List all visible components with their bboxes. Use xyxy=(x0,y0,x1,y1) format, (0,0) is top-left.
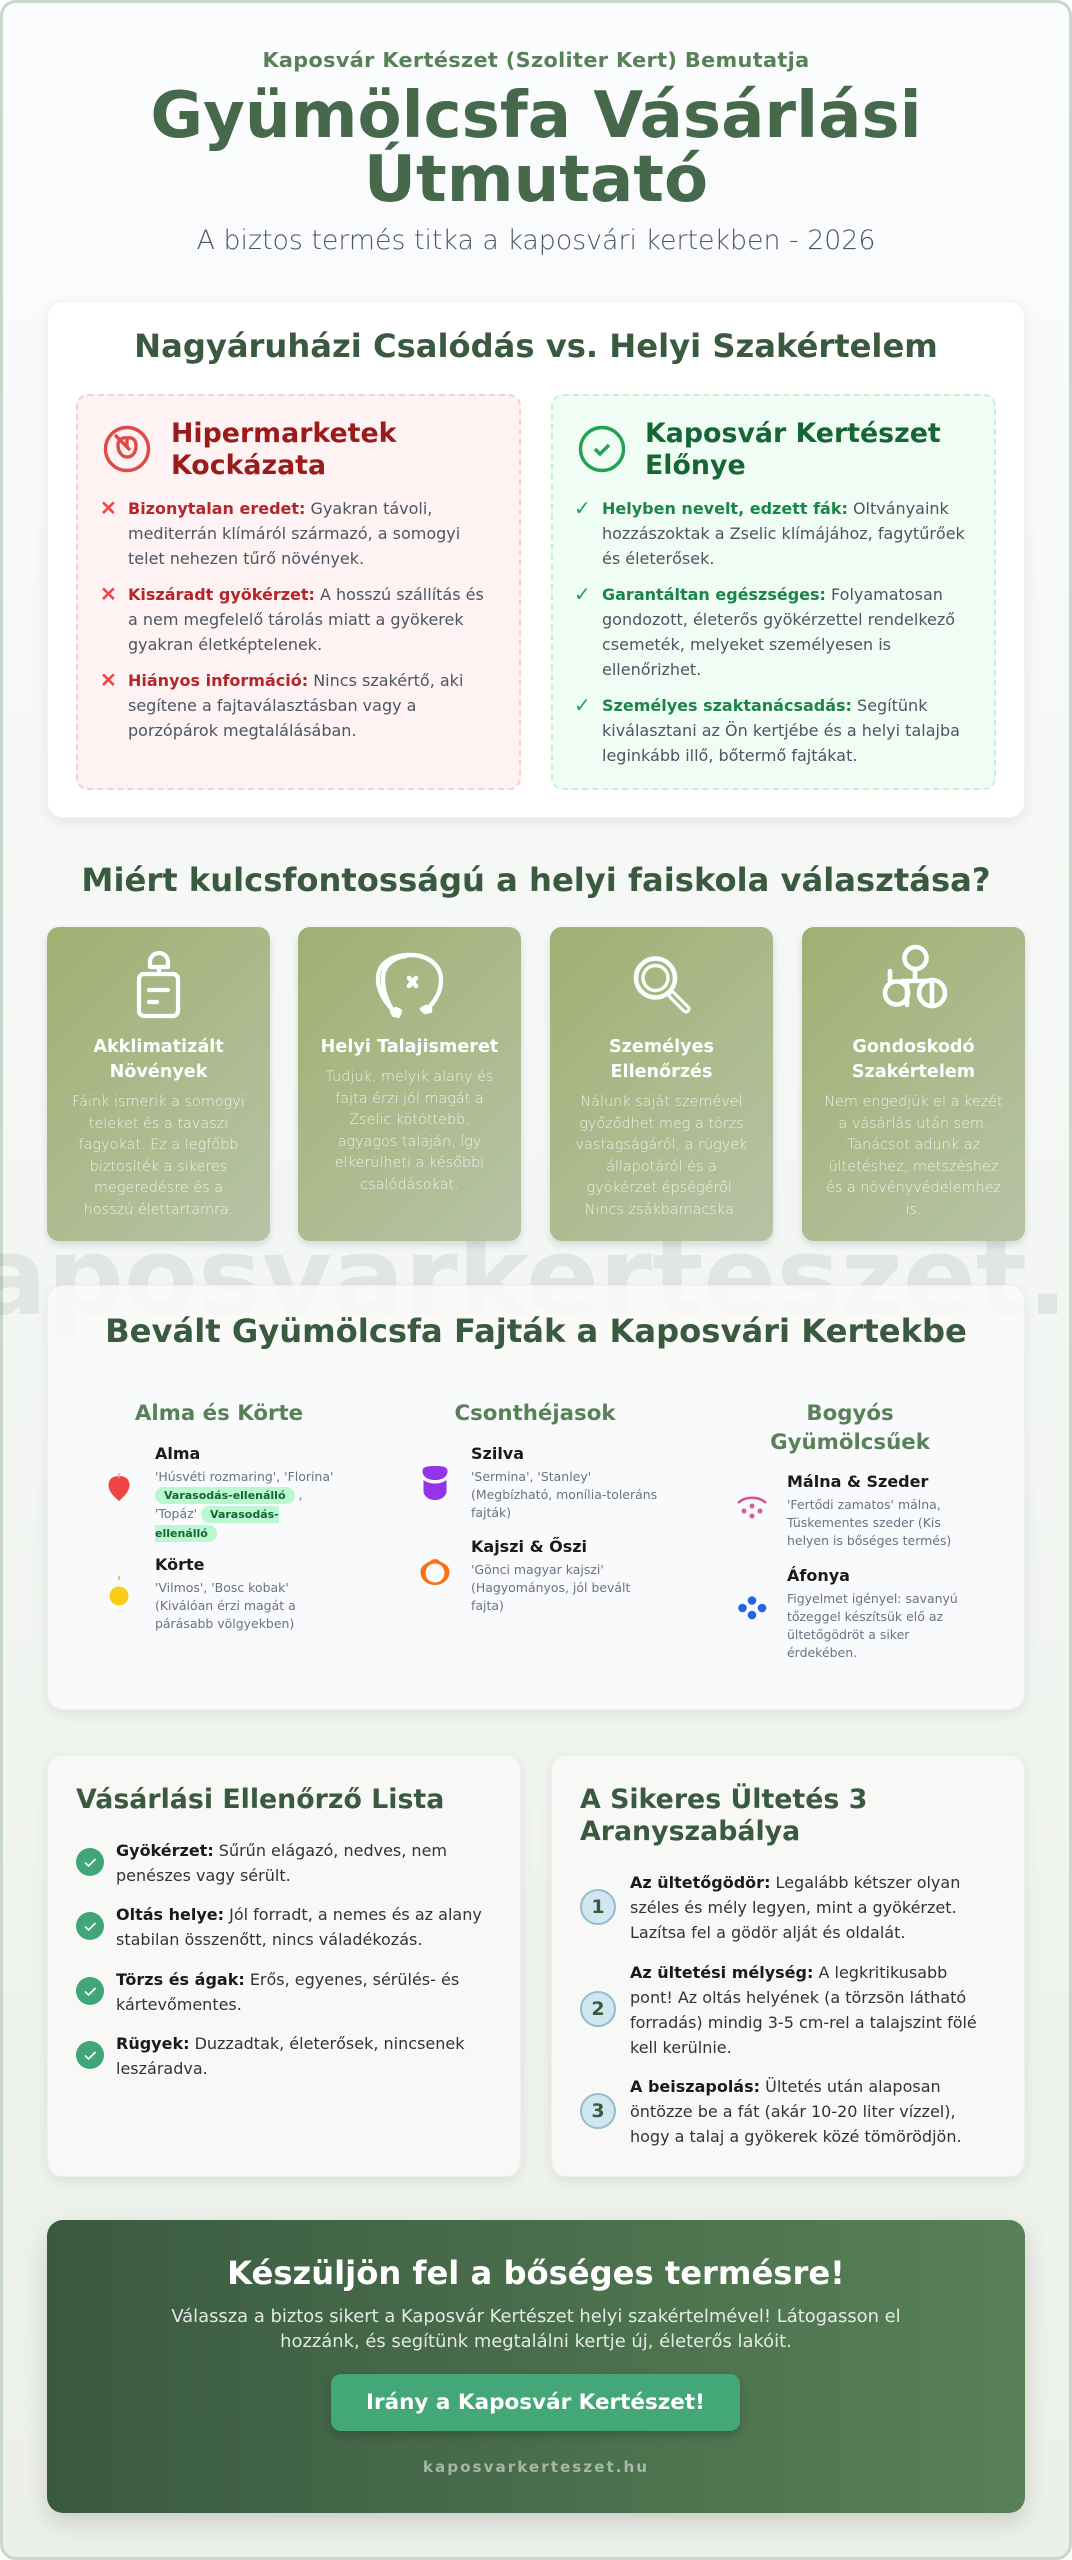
column: berries xyxy=(708,1380,995,1682)
feature text: Nem engedjük el a kezét xyxy=(824,1094,1003,1110)
feature card: soil knowledge xyxy=(298,927,521,1241)
checklist item 4 xyxy=(47,2030,521,2080)
advantage 3: Személyes szaktanácsadás: Segítünk xyxy=(602,696,927,714)
feature text xyxy=(824,1094,1003,1218)
feature text: Nálunk saját szemével xyxy=(580,1094,743,1110)
feature title: Gondoskodó xyxy=(852,1037,975,1057)
heading: rules: A Sikeres Ültetés 3 xyxy=(580,1784,867,1815)
feature title: Szakértelem xyxy=(852,1062,975,1082)
advantage 2: gondozott, életerős gyökérzettel rendelkező xyxy=(602,610,955,628)
rule 1 xyxy=(551,1870,1025,1944)
feature card: acclimatized xyxy=(47,927,270,1241)
name: Körte xyxy=(155,1555,204,1574)
risk 1: ✕ xyxy=(100,496,117,520)
feature title: Ellenőrzés xyxy=(611,1062,712,1082)
feature title xyxy=(609,1037,714,1082)
risk 2: Kiszáradt gyökérzet: A hosszú szállítás és xyxy=(128,584,484,604)
advantage 2: Garantáltan egészséges: Folyamatosan xyxy=(602,584,943,604)
heading: comparison: Nagyáruházi Csalódás vs. Helyi Szakértelem xyxy=(134,327,938,365)
icon: check xyxy=(76,1912,104,1940)
feature title: Helyi Talajismeret xyxy=(321,1037,498,1057)
advantage 2: ✓ xyxy=(574,582,591,606)
name: Szilva xyxy=(471,1444,524,1463)
risk 2: gyakran életképtelenek. xyxy=(128,634,322,654)
number badge xyxy=(580,1991,616,2027)
feature text xyxy=(575,1094,748,1218)
description: párásabb völgyekben) xyxy=(155,1616,294,1631)
variety: apple xyxy=(108,1444,333,1542)
advantage 1: ✓ xyxy=(574,496,591,520)
feature text: Fáink ismerik a somogyi xyxy=(72,1094,245,1110)
icon: pear xyxy=(110,1576,128,1606)
variety: pear xyxy=(110,1555,296,1631)
feature text: győződhet meg a törzs xyxy=(579,1116,744,1132)
cta button xyxy=(331,2374,740,2431)
rule 3: A beiszapolás: Ültetés után alaposan xyxy=(630,2076,941,2096)
feature text: is. xyxy=(905,1202,922,1218)
description: (Hagyományos, jól bevált xyxy=(471,1580,630,1595)
icon: check xyxy=(76,1848,104,1876)
icon: check circle xyxy=(578,426,626,472)
feature text: vastagságáról, a rügyek xyxy=(575,1137,748,1153)
risk 3 xyxy=(100,668,463,740)
column heading: Gyümölcsűek xyxy=(770,1430,930,1455)
advantage 1: Helyben nevelt, edzett fák: Oltványaink xyxy=(602,498,949,518)
feature text: állapotáról és a xyxy=(606,1158,717,1174)
description xyxy=(155,1580,296,1631)
number badge: 2 xyxy=(591,1998,605,2020)
name: Áfonya xyxy=(787,1566,850,1585)
feature text: agyagos talaján, így xyxy=(338,1134,481,1150)
risk 3: Hiányos információ: Nincs szakértő, aki xyxy=(128,670,463,690)
advantage 3: leginkább illő, bőtermő fajtákat. xyxy=(602,746,857,764)
description: fajta) xyxy=(471,1598,504,1613)
checklist item 2 xyxy=(47,1902,521,1952)
risk 1 xyxy=(100,496,460,568)
risk 2 xyxy=(100,582,484,654)
advantage list xyxy=(574,496,965,764)
icon: magnifier xyxy=(634,956,690,1014)
column: stone fruits xyxy=(393,1380,680,1682)
feature text: Nincs zsákbamacska. xyxy=(585,1202,738,1218)
cta text: Válassza a biztos sikert a Kaposvár Kertészet helyi szakértelmével! Látogasson el xyxy=(171,2306,901,2327)
cta heading: Készüljön fel a bőséges termésre! xyxy=(227,2254,845,2292)
panel title: Kaposvár Kertészet xyxy=(645,418,941,449)
website: kaposvarkerteszet.hu xyxy=(423,2458,649,2476)
feature text: fagyokat. Ez a legfőbb xyxy=(79,1137,238,1153)
checklist item 3: Törzs és ágak: Erős, egyenes, sérülés- és xyxy=(116,1970,459,1988)
rule 1: Lazítsa fel a gödör alját és oldalát. xyxy=(630,1922,905,1942)
cta button: Irány a Kaposvár Kertészet! xyxy=(366,2390,705,2415)
feature text: elkerülheti a későbbi xyxy=(335,1155,484,1171)
advantage 2: ellenőrizhet. xyxy=(602,660,701,678)
panel: golden rules xyxy=(551,1755,1025,2177)
feature text: hosszú élettartamra. xyxy=(84,1202,233,1218)
description: Figyelmet igényel: savanyú xyxy=(787,1591,958,1606)
feature text: gyökérzet épségéről. xyxy=(586,1180,736,1196)
feature text: és a növényvédelemhez xyxy=(826,1180,1001,1196)
checklist item 1: Gyökérzet: Sűrűn elágazó, nedves, nem xyxy=(116,1840,447,1860)
icon: raspberry xyxy=(737,1496,767,1518)
number badge xyxy=(580,2093,616,2129)
name: Málna & Szeder xyxy=(787,1472,928,1491)
description xyxy=(787,1496,951,1550)
description xyxy=(471,1469,657,1520)
advantage 2 xyxy=(574,582,955,678)
feature title: Akklimatizált xyxy=(93,1037,224,1057)
feature text: csalódásokat. xyxy=(360,1176,459,1192)
rule 2: kell kerülnie. xyxy=(630,2038,732,2056)
column heading: Alma és Körte xyxy=(135,1401,303,1426)
column heading: Csonthéjasok xyxy=(454,1401,616,1426)
rule 2 xyxy=(551,1960,1025,2060)
panel title xyxy=(171,418,397,481)
advantage 1: és életerősek. xyxy=(602,548,714,568)
cta text xyxy=(47,2304,1025,2354)
risk 2: a nem megfelelő tárolás miatt a gyökerek xyxy=(128,610,464,628)
panel title: Előnye xyxy=(645,450,746,481)
rule 2: forradás) mindig 3-5 cm-rel a talajszint fölé xyxy=(630,2012,977,2032)
call to action xyxy=(47,2220,1025,2513)
feature text: a vásárlás után sem. xyxy=(838,1116,989,1132)
icon: check xyxy=(76,1977,104,2005)
icon: apple xyxy=(108,1473,130,1501)
heading: varieties: Bevált Gyümölcsfa Fajták a Kaposvári Kertekbe xyxy=(105,1312,967,1350)
description: 'Fertődi zamatos' málna, xyxy=(787,1497,941,1512)
rule 2: Az ültetési mélység: A legkritikusabb xyxy=(630,1962,947,1982)
number badge: 3 xyxy=(591,2100,605,2122)
risk 2: ✕ xyxy=(100,582,117,606)
description xyxy=(787,1590,958,1662)
description: 'Gönci magyar kajszi' xyxy=(471,1562,604,1577)
description: tőzeggel készítsük elő az xyxy=(787,1609,943,1624)
title: Gyümölcsfa Vásárlási xyxy=(150,78,922,153)
risk 1: mediterrán klímáról származó, a somogyi xyxy=(128,524,460,542)
icon: tag xyxy=(136,950,180,1018)
icon: apricot xyxy=(420,1559,450,1585)
heading: checklist: Vásárlási Ellenőrző Lista xyxy=(76,1784,444,1815)
feature title: Személyes xyxy=(609,1037,714,1057)
variety: apricot xyxy=(420,1536,630,1613)
advantage 2: csemeték, melyeket személyesen is xyxy=(602,634,891,654)
feature text: teleket és a tavaszi xyxy=(89,1116,228,1132)
feature text: Tanácsot adunk az xyxy=(847,1137,980,1153)
icon: care xyxy=(882,944,948,1008)
feature text: ültetéshez, metszéshez xyxy=(829,1158,998,1174)
name: Kajszi & Őszi xyxy=(471,1537,587,1556)
checklist item 2: stabilan összenőtt, nincs váladékozás. xyxy=(116,1930,422,1948)
risk 3: segítene a fajtaválasztásban vagy a xyxy=(128,696,416,714)
heading: why local nursery: Miért kulcsfontosságú a helyi faiskola választása? xyxy=(81,861,991,899)
feature text: Zselic kötöttebb, xyxy=(349,1112,470,1128)
variety: raspberry xyxy=(737,1472,951,1548)
feature card: personal inspection xyxy=(550,927,773,1241)
variety: plum xyxy=(422,1444,657,1520)
description: fajták) xyxy=(471,1505,511,1520)
risk 1: Bizonytalan eredet: Gyakran távoli, xyxy=(128,498,432,518)
kicker: Kaposvár Kertészet (Szoliter Kert) Bemutatja xyxy=(262,48,810,72)
checklist item 1: penészes vagy sérült. xyxy=(116,1866,291,1884)
panel title xyxy=(645,418,941,481)
advantage 3: kiválasztani az Ön kertjébe és a helyi talajba xyxy=(602,720,960,740)
panel: comparison section xyxy=(47,301,1025,818)
header xyxy=(150,48,922,256)
panel: hypermarket risks xyxy=(76,394,521,790)
rule 2: pont! Az oltás helyének (a törzsön látható xyxy=(630,1988,966,2006)
number badge: 1 xyxy=(591,1896,605,1918)
icon: check xyxy=(76,2041,104,2069)
feature title: Növények xyxy=(110,1062,207,1082)
description: 'Húsvéti rozmaring', 'Florina' Varasodás-ellenálló , 'Topáz' Varasodás-ellenálló xyxy=(155,1469,333,1540)
description: 'Vilmos', 'Bosc kobak' xyxy=(155,1580,289,1595)
subtitle: A biztos termés titka a kaposvári kertekben - 2026 xyxy=(197,225,875,256)
feature text xyxy=(326,1069,493,1192)
cta text: hozzánk, és segítünk megtalálni kertje új, életerős lakóit. xyxy=(280,2331,792,2352)
description: Tüskementes szeder (Kis xyxy=(787,1515,941,1530)
advantage 1: hozzászoktak a Zselic klímájához, fagytűrőek xyxy=(602,524,965,542)
advantage 3 xyxy=(574,692,960,764)
advantage 1 xyxy=(574,496,965,568)
name: Alma xyxy=(155,1444,200,1463)
panel title: Hipermarketek xyxy=(171,418,396,449)
risk list xyxy=(100,496,484,740)
rule 3: hogy a talaj a gyökerek közé tömörödjön. xyxy=(630,2126,962,2146)
column heading xyxy=(770,1401,930,1455)
icon: plum xyxy=(422,1466,448,1500)
feature text xyxy=(72,1094,245,1218)
advantage 3: ✓ xyxy=(574,692,591,716)
panel: local nursery advantages xyxy=(551,394,996,790)
heading: rules xyxy=(580,1784,867,1848)
checklist item 3 xyxy=(47,1966,521,2016)
checklist item 4: leszáradva. xyxy=(116,2058,208,2078)
number badge xyxy=(580,1889,616,1925)
feature text: biztosíték a sikeres xyxy=(90,1158,227,1174)
icon: horseshoe xyxy=(376,952,444,1018)
rule 3 xyxy=(551,2074,1025,2148)
feature title xyxy=(93,1037,224,1082)
rule 1: széles és mély legyen, mint a gyökérzet. xyxy=(630,1898,957,1916)
panel: proven varieties xyxy=(47,1285,1025,1710)
heading: rules: Aranyszabálya xyxy=(580,1816,800,1847)
description: helyen is bőséges termés) xyxy=(787,1533,951,1548)
description: érdekében. xyxy=(787,1645,857,1660)
rule 1: Az ültetőgödör: Legalább kétszer olyan xyxy=(630,1872,960,1892)
icon: blueberry xyxy=(737,1594,767,1622)
feature card: caring expertise xyxy=(802,927,1025,1241)
feature text: megeredésre és a xyxy=(94,1180,223,1196)
panel title: Kockázata xyxy=(171,450,326,481)
checklist item 2: Oltás helye: Jól forradt, a nemes és az alany xyxy=(116,1904,482,1924)
description: (Kiválóan érzi magát a xyxy=(155,1598,296,1613)
checklist item 4: Rügyek: Duzzadtak, életerősek, nincsenek xyxy=(116,2034,464,2052)
description: (Megbízható, monília-toleráns xyxy=(471,1487,657,1502)
column: apple and pear xyxy=(77,1380,364,1682)
column heading: Bogyós xyxy=(806,1401,894,1426)
description: 'Sermina', 'Stanley' xyxy=(471,1469,591,1484)
risk 1: telet nehezen tűrő növények. xyxy=(128,548,364,568)
variety: blueberry xyxy=(708,1562,995,1662)
description xyxy=(471,1562,630,1613)
icon: no hypermarket xyxy=(104,426,150,472)
feature text: fajta érzi jól magát a xyxy=(335,1090,484,1106)
rule 3: öntözze be a fát (akár 10-20 liter vízzel), xyxy=(630,2102,956,2120)
feature text: Tudjuk, melyik alany és xyxy=(326,1069,493,1085)
risk 3: ✕ xyxy=(100,668,117,692)
title xyxy=(150,78,922,216)
panel: purchase checklist xyxy=(47,1755,521,2177)
title: Útmutató xyxy=(364,142,708,216)
description: ültetőgödröt a siker xyxy=(787,1627,909,1642)
checklist item 1 xyxy=(47,1838,521,1888)
feature title xyxy=(852,1037,975,1082)
risk 3: porzópárok megtalálásában. xyxy=(128,720,357,740)
checklist item 3: kártevőmentes. xyxy=(116,1994,242,2014)
